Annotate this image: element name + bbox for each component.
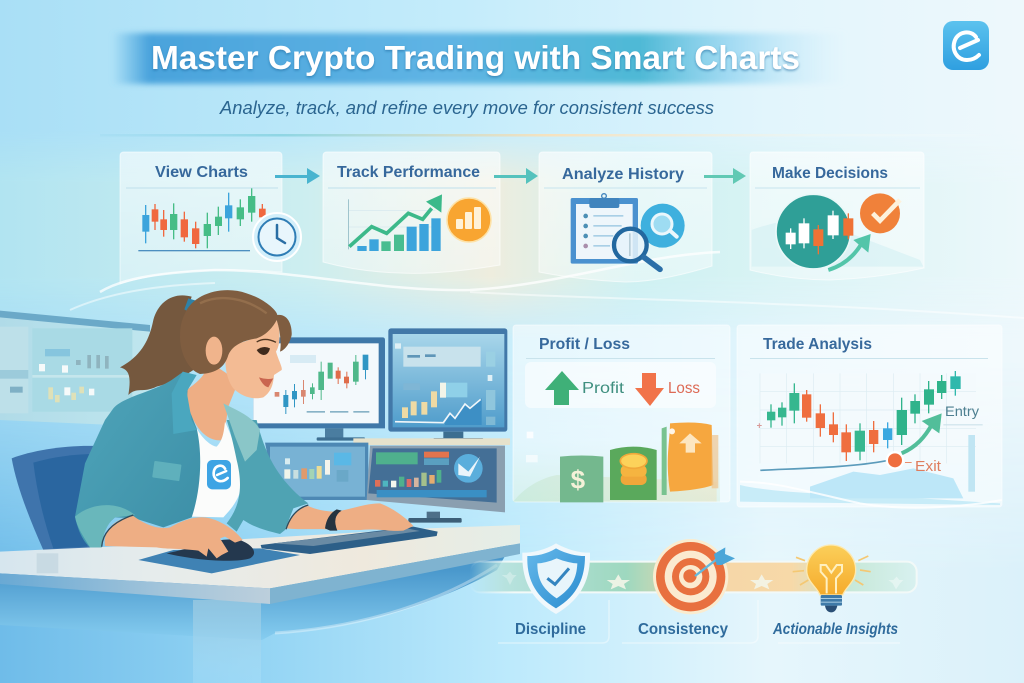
candlestick chart (138, 188, 266, 251)
label: profit: Profit (582, 380, 625, 397)
desk leg (193, 600, 261, 683)
under desk shadow (0, 530, 520, 640)
arrow 3 (704, 168, 746, 184)
title banner (112, 33, 847, 84)
value: consistency (638, 539, 735, 638)
lips (259, 377, 273, 387)
hair top (180, 290, 292, 374)
icon: orange bar badge (447, 198, 491, 242)
candlestick chart (740, 371, 1002, 508)
hair tie (184, 298, 196, 312)
label: Consistency (638, 621, 728, 638)
jacket collar (172, 372, 197, 434)
panel: profit / loss (513, 325, 730, 502)
icon: clipboard and magnifier (571, 194, 685, 269)
money illustration: $ (571, 464, 586, 494)
monitor: lower bar screen (265, 443, 368, 500)
monitor: lower dashboard (367, 446, 505, 523)
label: exit: Exit (915, 458, 942, 475)
hair: ponytail (120, 295, 193, 395)
logo (943, 21, 989, 70)
arrow: profit (545, 371, 579, 405)
jacket right side (227, 420, 308, 534)
shirt logo (207, 460, 231, 489)
value: discipline (515, 543, 590, 638)
icon: light bulb (793, 545, 871, 612)
icon: shield (522, 543, 590, 614)
label: Actionable Insights (772, 621, 898, 638)
white shirt (192, 422, 242, 517)
step card: analyze history (539, 152, 712, 282)
arrow: loss (635, 373, 664, 406)
arrow 2 (494, 168, 538, 184)
heading: Analyze History (562, 166, 684, 183)
jacket body (75, 372, 200, 547)
heading: Make Decisions (772, 165, 888, 182)
panel: trade analysis (737, 325, 1002, 508)
woman at desk (75, 290, 438, 573)
step card: view charts (120, 152, 301, 284)
desk front edge (0, 573, 270, 604)
heading: View Charts (155, 164, 248, 181)
desk (0, 525, 520, 604)
icon: clock (253, 213, 301, 261)
money illustration (513, 422, 720, 502)
values ribbon (470, 562, 917, 592)
eye (257, 347, 270, 355)
right forearm and hand (287, 503, 413, 531)
chair (12, 446, 97, 550)
monitors (253, 328, 510, 523)
label: Discipline (515, 621, 586, 638)
keyboard (261, 527, 438, 554)
monitor: dashboard (388, 328, 507, 442)
arrow 1 (275, 168, 320, 184)
icon: target (653, 539, 735, 614)
lower curve (275, 565, 497, 633)
watch (325, 509, 342, 531)
label: loss: Loss (668, 380, 700, 397)
step card: track performance (323, 152, 500, 273)
heading: Trade Analysis (763, 336, 872, 353)
candlestick chart: + (757, 420, 763, 430)
left forearm and hand (105, 516, 243, 558)
label: entry: Entry (945, 403, 979, 419)
background wall panels (0, 311, 150, 427)
heading: Profit / Loss (539, 336, 630, 353)
subtitle: Analyze, track, and refine every move for consistent success (219, 98, 714, 118)
desk top (0, 525, 520, 588)
ear (206, 337, 222, 365)
icon: candle globe and check (752, 193, 923, 270)
mouse (167, 539, 254, 561)
mouse pad (102, 503, 438, 573)
step card: make decisions (750, 152, 924, 280)
sleeve fold (75, 505, 135, 547)
jacket pocket (152, 461, 182, 481)
label frames (498, 600, 900, 643)
title: Master Crypto Trading with Smart Charts (151, 39, 800, 76)
heading: Track Performance (337, 164, 480, 181)
value: actionable insights (772, 545, 898, 638)
face (225, 320, 282, 398)
growth chart (348, 194, 442, 251)
neck and chest (187, 360, 235, 440)
monitor: candlestick screen (253, 337, 385, 441)
desk shelf (353, 438, 510, 445)
jacket right lapel (223, 403, 260, 462)
